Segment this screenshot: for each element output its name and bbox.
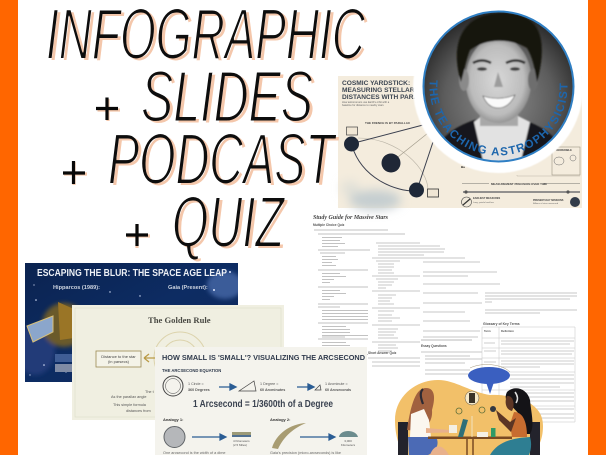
panel: cosmic yardstick infographic: How astronomers use Earth's orbit with a bbox=[342, 100, 390, 104]
study guide heading: Study Guide for Massive Stars bbox=[313, 215, 389, 221]
chairs bbox=[398, 422, 408, 455]
glossary table bbox=[482, 327, 575, 422]
step one: 360 Degrees bbox=[188, 388, 210, 392]
panel: study guide document: Multiple Choice Quiz bbox=[313, 223, 345, 227]
formula label box bbox=[96, 351, 141, 367]
icon: satellite bbox=[27, 302, 76, 342]
short answer section: Short Answer Quiz bbox=[368, 351, 397, 355]
orbit diagram bbox=[352, 125, 433, 191]
panel: slide visualizing the arcsecond: 3,000 bbox=[344, 439, 352, 443]
panel: presenter portrait badge bbox=[412, 10, 582, 174]
white halo bbox=[413, 3, 583, 173]
icon: small bubbles bbox=[456, 407, 485, 414]
arrow bbox=[219, 384, 236, 390]
icon: comet bbox=[272, 423, 306, 449]
panel: slide visualizing the arcsecond: Kilometers bbox=[341, 443, 356, 447]
icon: space telescope bbox=[570, 197, 580, 207]
step three: 60 Arcseconds bbox=[325, 388, 351, 392]
panel: cosmic yardstick infographic bbox=[338, 76, 582, 210]
panel: cosmic yardstick infographic: PRESENT-DAY MISSIONS bbox=[533, 199, 564, 202]
compass diagram bbox=[154, 332, 206, 384]
blue ring bbox=[424, 12, 574, 162]
panel: cosmic yardstick infographic: baseline for distance to nearby stars bbox=[342, 103, 384, 107]
slide title: ESCAPING THE BLUR: THE SPACE AGE LEAP bbox=[37, 268, 227, 279]
panel: slide visualizing the arcsecond: (2.5 Miles) bbox=[233, 443, 247, 447]
sun disc background bbox=[395, 380, 543, 455]
icon: sun bbox=[382, 154, 400, 172]
icon: triangle bbox=[239, 381, 256, 391]
panel: cosmic yardstick infographic: Billions of stars measured bbox=[533, 202, 559, 205]
analogy headings: Analogy 1: bbox=[163, 417, 183, 422]
arrow bbox=[297, 384, 314, 390]
title lettering: QUIZ bbox=[172, 183, 285, 263]
panel: cosmic yardstick infographic: EARLIEST MEASURES bbox=[473, 197, 501, 200]
slide caption: As the parallax angle bbox=[111, 395, 146, 399]
step one bbox=[188, 382, 210, 392]
step two bbox=[260, 382, 286, 391]
measurement box bbox=[552, 147, 580, 175]
title shadow: SLIDES bbox=[144, 60, 316, 140]
step two: 1 Degree = bbox=[260, 382, 278, 386]
title shadow: PODCAST bbox=[111, 122, 340, 202]
slide caption: distances from bbox=[126, 409, 151, 413]
equation subhead: THE ARCSECOND EQUATION bbox=[162, 368, 221, 373]
step one: 1 Circle = bbox=[188, 382, 204, 386]
icon: telescope bbox=[462, 197, 472, 207]
icon: earth left bbox=[344, 136, 359, 152]
analogy headings bbox=[163, 418, 290, 422]
title lettering: PODCAST bbox=[108, 120, 337, 200]
icon: podcast bubble bbox=[465, 391, 479, 405]
icon: dime bbox=[164, 426, 185, 448]
panel: cosmic yardstick infographic: Ba bbox=[461, 165, 465, 169]
formula label box: Distance to the star bbox=[101, 354, 136, 359]
icon: calendar right bbox=[428, 189, 438, 197]
photo bbox=[424, 12, 572, 160]
cloud texture bbox=[341, 181, 401, 210]
plus signs bbox=[63, 98, 150, 248]
glossary heading: Glossary of Key Terms bbox=[483, 322, 520, 326]
icon: landscape bbox=[232, 432, 251, 437]
panel: cosmic yardstick infographic: INCREDIBLE bbox=[556, 148, 572, 152]
equation result: 1 Arcsecond = 1/3600th of a Degree bbox=[193, 398, 333, 410]
glossary table: Definition bbox=[501, 329, 514, 333]
panel: cosmic yardstick infographic: DISTANCES WITH PARA bbox=[342, 94, 419, 101]
quiz question lines bbox=[314, 230, 405, 364]
slide title: HOW SMALL IS 'SMALL'? VISUALIZING THE ARCSECOND bbox=[162, 355, 365, 362]
panel: podcast illustration bbox=[395, 365, 543, 455]
glossary table: Term bbox=[484, 329, 491, 333]
panel: study guide document bbox=[313, 215, 577, 422]
analogy headings: Analogy 2: bbox=[270, 417, 290, 422]
icon: small triangle bbox=[315, 385, 321, 390]
analogy captions: One arcsecond is the width of a dime bbox=[163, 451, 225, 455]
title lettering: SLIDES bbox=[141, 58, 313, 138]
timeline: MEASUREMENT PRECISION OVER TIME bbox=[491, 182, 547, 186]
panel: cosmic yardstick infographic: Long, painful and few bbox=[473, 202, 494, 204]
left orange border bbox=[0, 0, 18, 455]
table bbox=[428, 436, 512, 439]
title shadow bbox=[49, 0, 369, 265]
icon: circle bbox=[163, 376, 183, 396]
slide caption: The t bbox=[145, 390, 155, 394]
slide caption bbox=[111, 390, 155, 413]
title shadow: QUIZ bbox=[175, 185, 288, 265]
step three bbox=[325, 382, 351, 391]
step three: 1 Arcminute = bbox=[325, 382, 348, 386]
badge lettering: THE TEACHING ASTROPHYSICIST bbox=[430, 80, 568, 156]
icon: observatory dome bbox=[339, 431, 358, 437]
starfield bbox=[15, 271, 243, 375]
title bbox=[46, 0, 369, 265]
formula label box: (in parsecs) bbox=[108, 359, 130, 364]
title lettering bbox=[46, 0, 366, 263]
extended text bbox=[485, 293, 577, 313]
data rows bbox=[55, 354, 72, 362]
panel: slide visualizing the arcsecond bbox=[155, 347, 367, 455]
icon: calendar left bbox=[346, 127, 358, 135]
step two: 60 Arcminutes bbox=[260, 388, 285, 392]
icon: gold arrow bbox=[144, 354, 155, 362]
essay section: Essay Questions bbox=[421, 344, 447, 348]
panel: slide escaping the blur bbox=[15, 263, 243, 382]
panel: cosmic yardstick infographic: MEASURING STELLAR bbox=[342, 87, 415, 94]
tablet and cups bbox=[449, 416, 496, 437]
slide caption: This simple formula bbox=[113, 403, 147, 407]
host right bbox=[490, 388, 532, 455]
panel: slide visualizing the arcsecond: 4 Kilometers bbox=[233, 439, 250, 443]
speech bubble bbox=[468, 365, 510, 394]
slide heading: The Golden Rule bbox=[148, 315, 211, 325]
slide subheads: Hipparcos (1989): bbox=[53, 285, 100, 291]
panel: slide the golden rule bbox=[72, 305, 284, 420]
arrow bbox=[192, 434, 226, 440]
infographic heading: COSMIC YARDSTICK: bbox=[342, 80, 410, 87]
panel: slide escaping the blur: Gaia (Present): bbox=[168, 285, 208, 291]
analogy captions: Gaia's precision (micro-arcseconds) is like bbox=[270, 451, 341, 455]
panel: cosmic yardstick infographic: THE FRENCH IS BY PARALLAX bbox=[365, 121, 410, 125]
arrow bbox=[300, 434, 335, 440]
host left bbox=[407, 388, 450, 455]
analogy captions bbox=[163, 452, 341, 455]
right orange border bbox=[588, 0, 606, 455]
icon: earth right bbox=[409, 182, 424, 198]
